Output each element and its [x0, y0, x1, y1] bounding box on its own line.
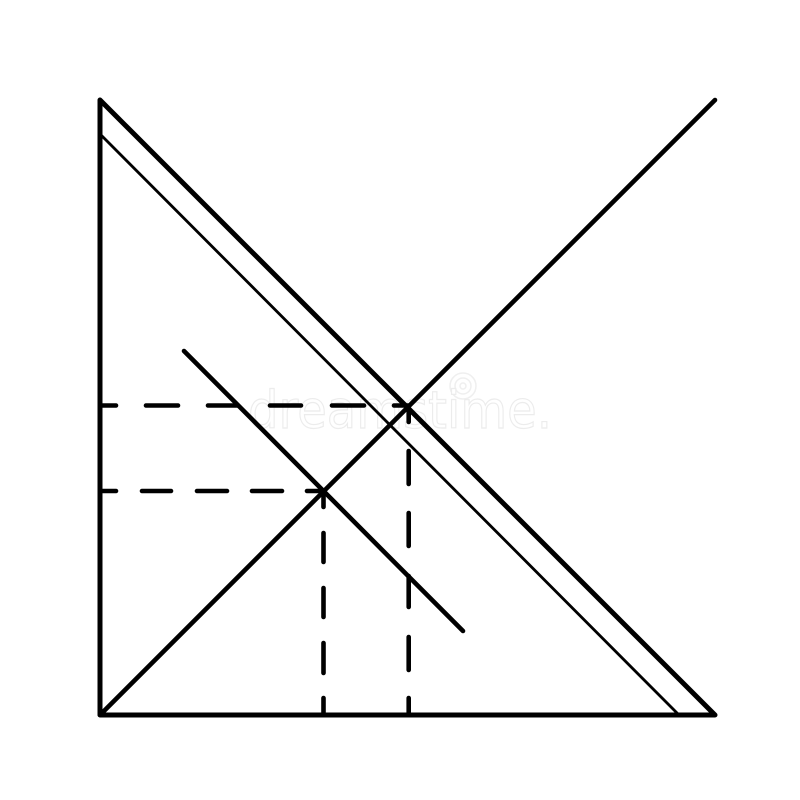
right vertical dashed line — [406, 406, 411, 715]
lower horizontal dashed line — [100, 489, 323, 493]
triangle outline: axes and main descending line — [100, 100, 715, 715]
upper horizontal dashed line — [100, 403, 408, 408]
thin diagonal line — [100, 134, 679, 715]
chart lines — [100, 100, 715, 715]
ascending diagonal line — [100, 100, 715, 715]
short descending line — [184, 351, 463, 631]
watermark icon: spiral — [450, 373, 476, 399]
left vertical dashed line — [321, 491, 326, 715]
watermark text: dreamstime. — [248, 381, 552, 441]
watermark — [248, 373, 552, 441]
